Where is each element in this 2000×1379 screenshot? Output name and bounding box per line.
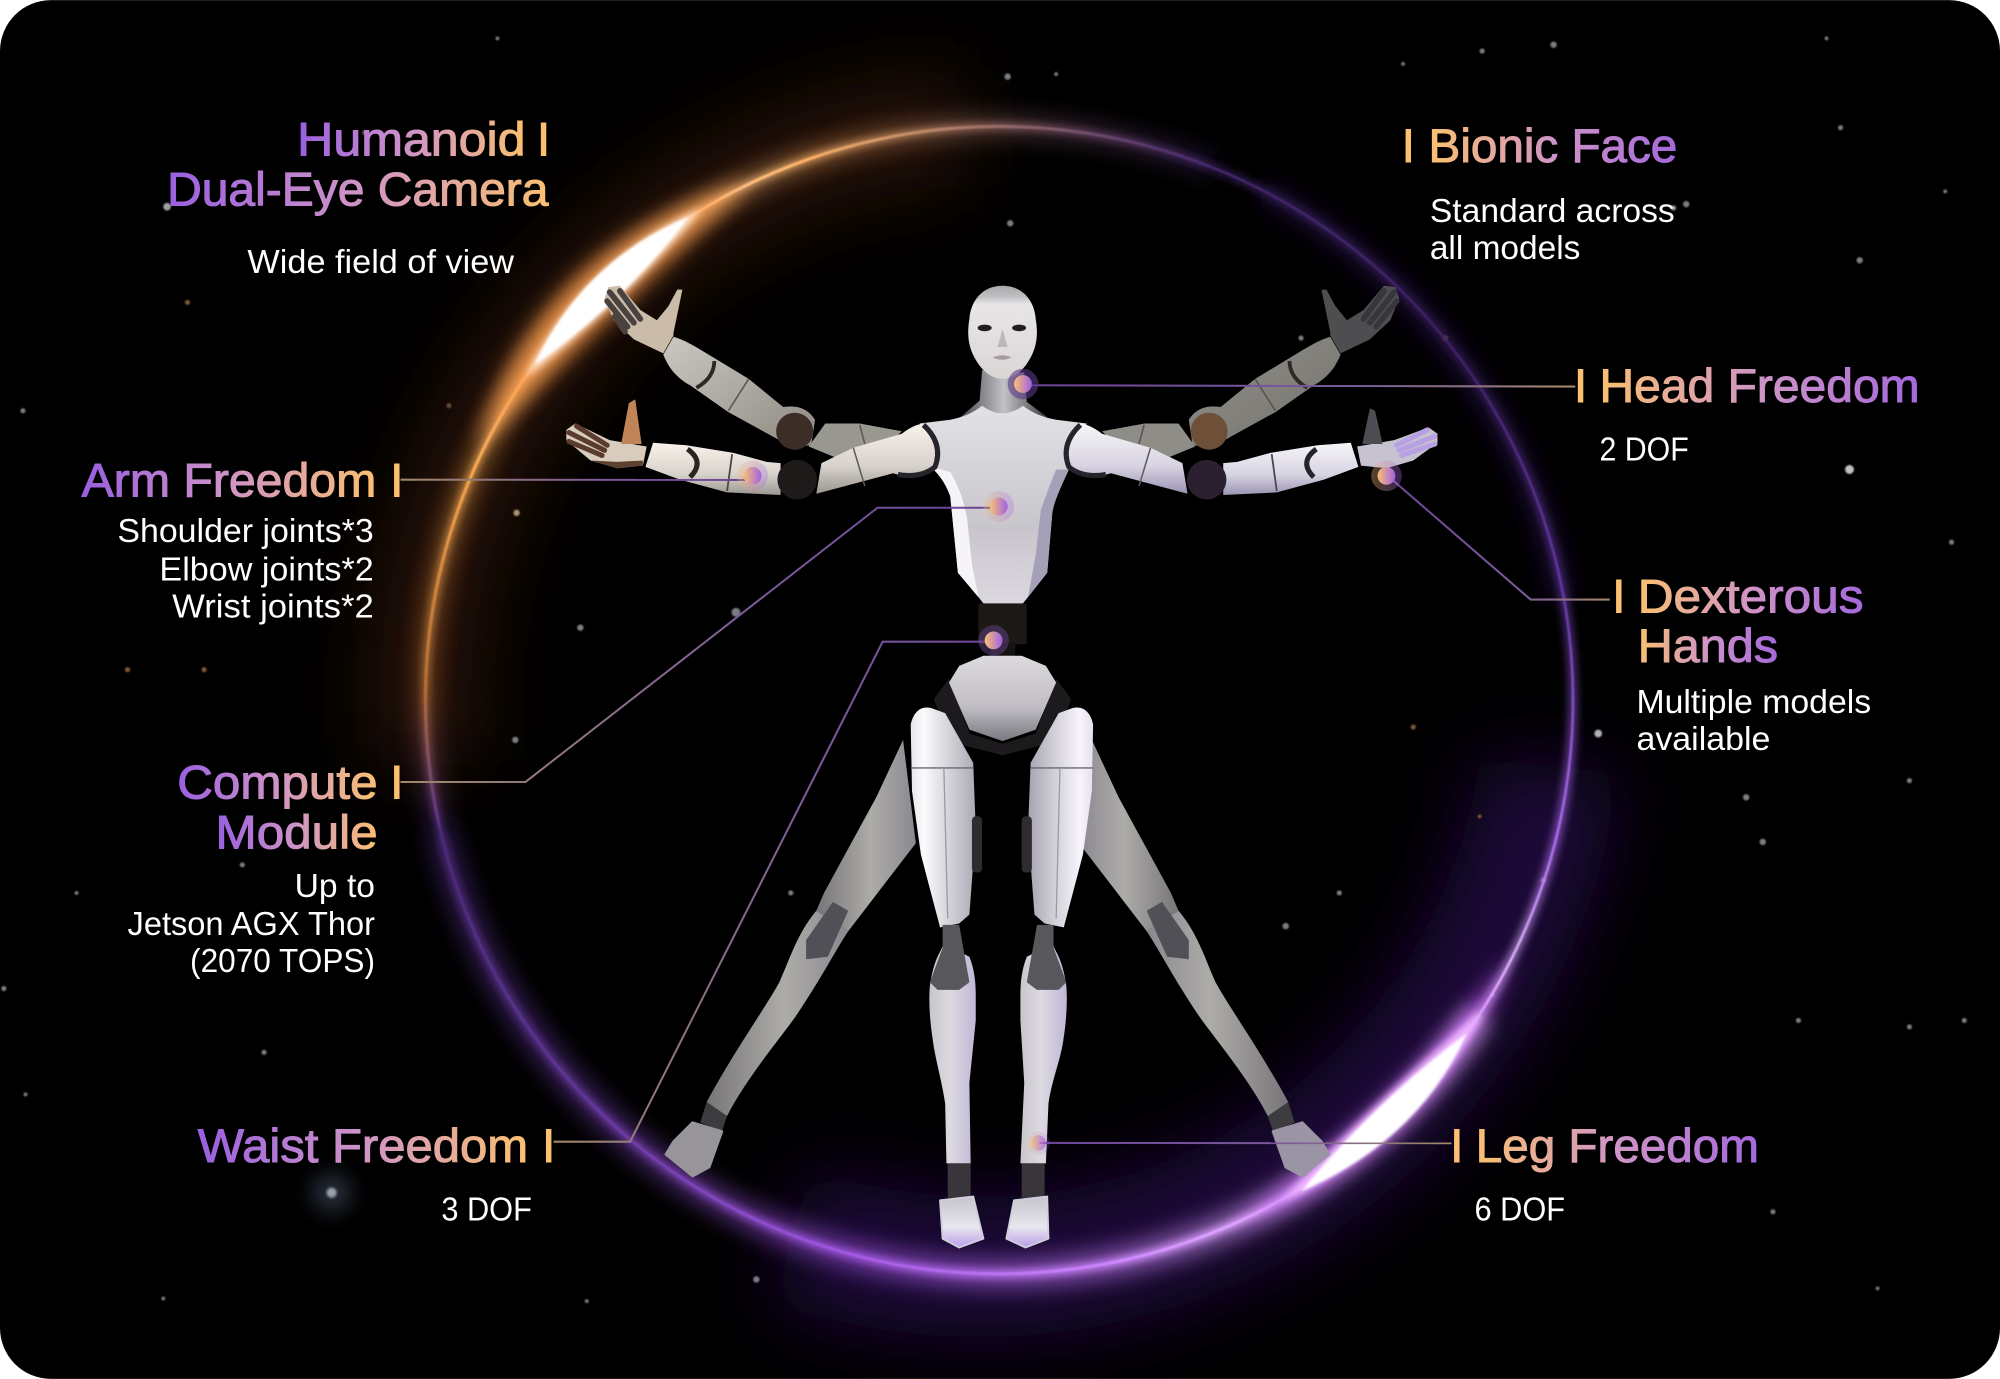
marker: head bbox=[1008, 369, 1038, 399]
label: compute module bbox=[128, 757, 403, 980]
front arm left bbox=[566, 399, 939, 499]
label: bionic face bbox=[1402, 120, 1677, 267]
label: dexterous hands: available bbox=[1636, 721, 1770, 758]
hip joints bbox=[934, 679, 1071, 755]
front leg right bbox=[1006, 707, 1093, 1248]
label: dexterous hands bbox=[1612, 570, 1871, 758]
label: head freedom bbox=[1574, 360, 1920, 469]
neck bbox=[960, 370, 1047, 417]
head bbox=[968, 286, 1037, 379]
robot bbox=[566, 286, 1438, 1248]
label: compute module: Up to bbox=[295, 868, 375, 905]
back arm right bbox=[1102, 286, 1399, 458]
label: dexterous hands: Multiple models bbox=[1636, 684, 1871, 721]
label: leg freedom: 6 DOF bbox=[1474, 1192, 1565, 1229]
pelvis bbox=[949, 656, 1056, 741]
front leg left bbox=[911, 707, 983, 1248]
label: arm freedom: Elbow joints*2 bbox=[159, 551, 374, 588]
back leg left bbox=[666, 740, 916, 1176]
back arm left bbox=[605, 286, 902, 458]
label: humanoid dual-eye camera bbox=[167, 114, 550, 281]
label: head freedom: I bbox=[1574, 360, 1587, 413]
label: humanoid dual-eye camera: I bbox=[537, 114, 550, 167]
label: head freedom: 2 DOF bbox=[1599, 432, 1689, 469]
distant star glow bbox=[311, 1172, 352, 1213]
marker: hands bbox=[1371, 461, 1402, 491]
marker: compute bbox=[983, 491, 1014, 522]
face features bbox=[978, 325, 1026, 360]
label: compute module: Compute bbox=[177, 757, 378, 810]
ring haze bbox=[425, 126, 1563, 1267]
label: arm freedom: I bbox=[390, 454, 403, 507]
label: arm freedom: Shoulder joints*3 bbox=[117, 513, 374, 550]
label: dexterous hands: I bbox=[1612, 570, 1625, 623]
front arm right bbox=[1065, 408, 1438, 499]
marker: leg bbox=[1027, 1131, 1050, 1154]
torso side panels bbox=[931, 467, 1069, 597]
label: waist freedom: 3 DOF bbox=[441, 1192, 532, 1229]
waist joint bbox=[978, 603, 1027, 657]
marker: waist bbox=[978, 625, 1009, 656]
label: dexterous hands: Hands bbox=[1638, 620, 1778, 673]
label: bionic face: I bbox=[1402, 120, 1415, 173]
callout lines bbox=[401, 385, 1610, 1143]
white flare upper left bbox=[478, 181, 753, 447]
label: arm freedom: Wrist joints*2 bbox=[172, 588, 374, 625]
ring: bright purple lower arc bbox=[440, 829, 1480, 1274]
back leg right bbox=[1079, 740, 1329, 1176]
label: head freedom: Head Freedom bbox=[1599, 360, 1920, 413]
label: compute module: Jetson AGX Thor bbox=[128, 906, 375, 943]
label: compute module: (2070 TOPS) bbox=[190, 943, 375, 980]
label: waist freedom: I bbox=[542, 1120, 555, 1173]
label: arm freedom bbox=[82, 454, 403, 625]
marker: arm bbox=[737, 461, 768, 491]
ring: orange arc bbox=[425, 126, 1212, 829]
label: waist freedom bbox=[198, 1120, 555, 1229]
glowing ring bbox=[425, 126, 1573, 1274]
label: leg freedom: I bbox=[1450, 1120, 1463, 1173]
ring: dim right arc bbox=[1212, 167, 1573, 1014]
label: compute module: I bbox=[390, 757, 403, 810]
label: arm freedom: Arm Freedom bbox=[82, 454, 376, 507]
label: leg freedom: Leg Freedom bbox=[1476, 1120, 1759, 1173]
label: dexterous hands: Dexterous bbox=[1638, 570, 1864, 623]
label: bionic face: all models bbox=[1430, 230, 1580, 267]
label: waist freedom: Waist Freedom bbox=[198, 1120, 528, 1173]
label: humanoid dual-eye camera: Dual-Eye Camera bbox=[167, 163, 549, 216]
label: bionic face: Bionic Face bbox=[1429, 120, 1677, 173]
label: compute module: Module bbox=[216, 806, 378, 859]
label: bionic face: Standard across bbox=[1430, 193, 1675, 230]
joint markers bbox=[737, 369, 1402, 1154]
torso bbox=[920, 406, 1087, 610]
white flare lower right bbox=[1231, 957, 1511, 1227]
label: leg freedom bbox=[1450, 1120, 1759, 1229]
label: humanoid dual-eye camera: Humanoid bbox=[297, 114, 526, 167]
label: humanoid dual-eye camera: Wide field of view bbox=[247, 244, 515, 281]
